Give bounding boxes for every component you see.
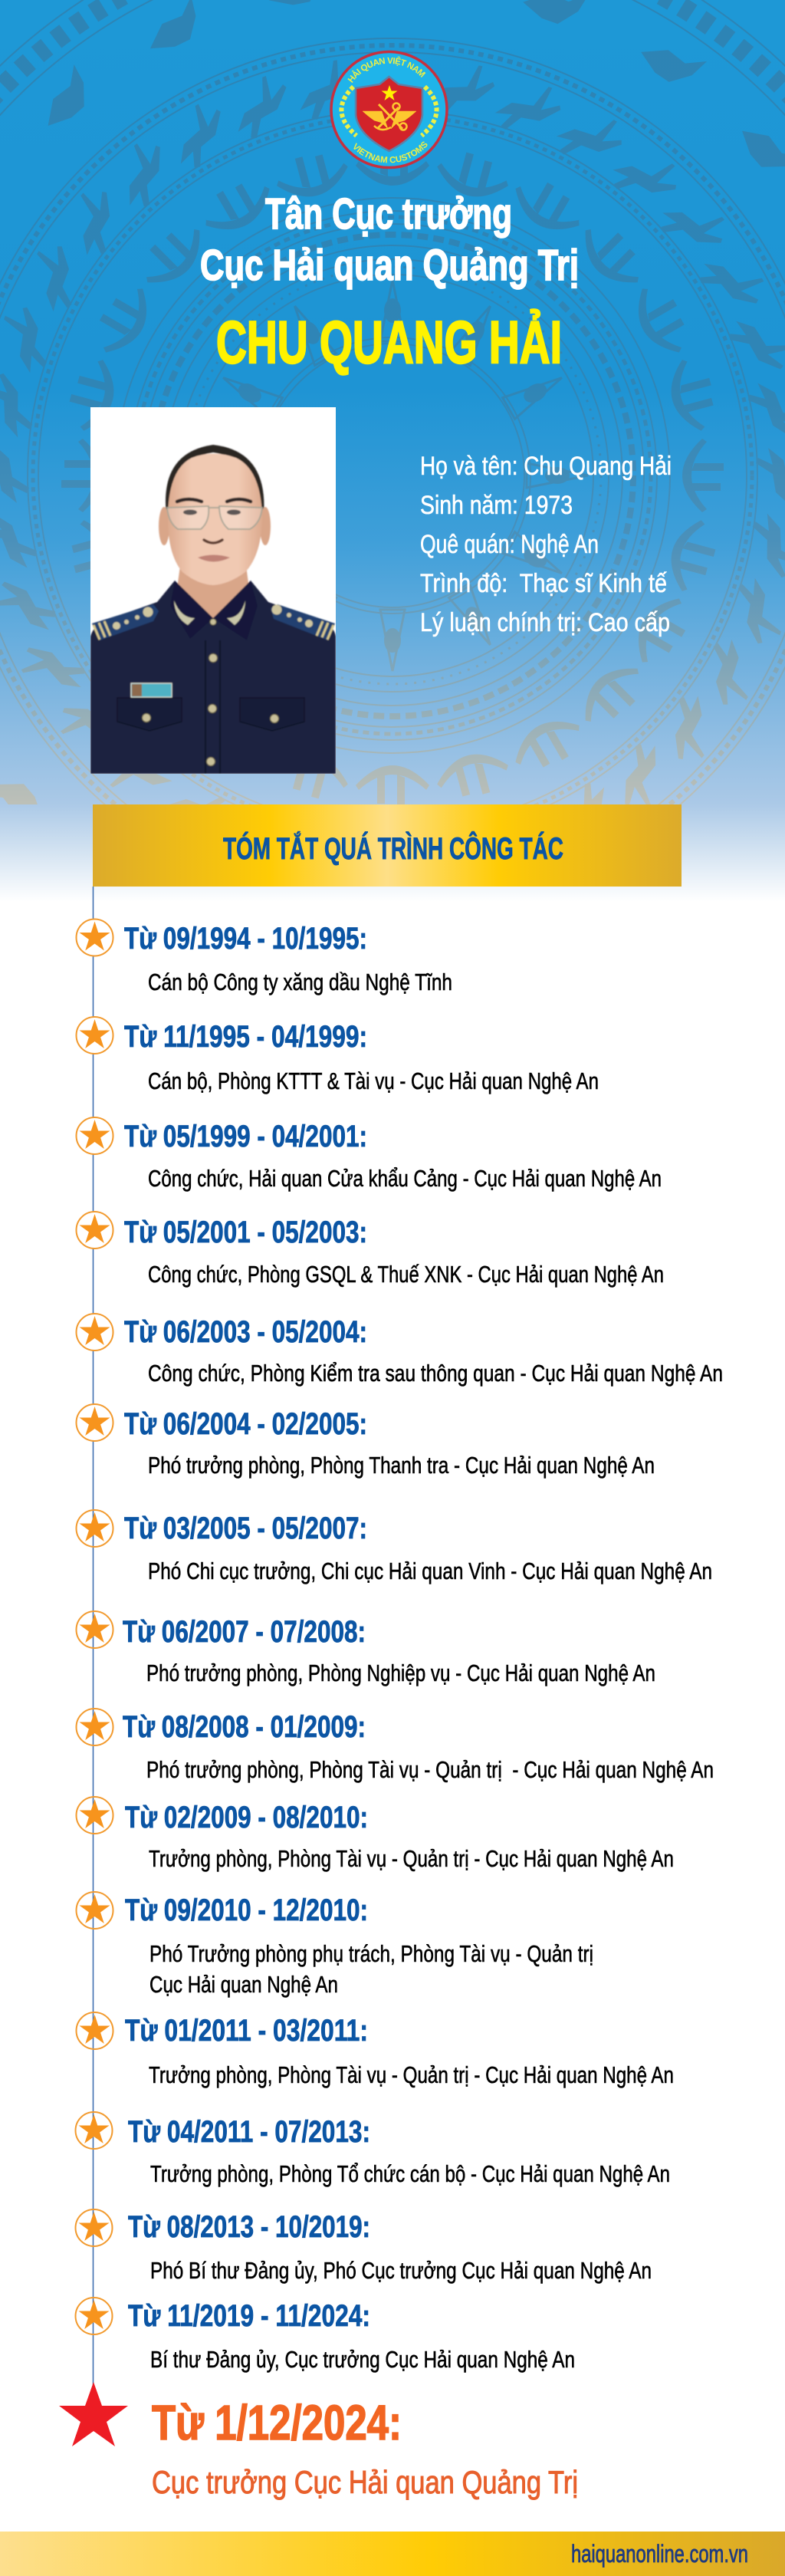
entry 8: [77, 1611, 655, 1686]
entry 10: [77, 1797, 674, 1872]
glasses: [167, 506, 262, 529]
icon: star badge: [77, 1709, 113, 1745]
uniform jacket: [90, 581, 336, 774]
info: full name: Họ và tên: Chu Quang Hải: [420, 452, 672, 481]
info: education: Trình độ: Thạc sĩ Kinh tế: [420, 569, 667, 598]
portrait photo: [90, 407, 336, 774]
icon: star badge: [75, 2112, 112, 2149]
nose: [204, 540, 222, 543]
entry 1: [77, 919, 452, 995]
left epaulet stripes: [94, 621, 110, 640]
person name: CHU QUANG HẢI: [216, 308, 562, 376]
entry 3: [77, 1117, 662, 1192]
collars: [170, 581, 213, 639]
buttons: [143, 619, 279, 765]
icon: star badge: [77, 1212, 113, 1249]
date: Từ 09/1994 - 10/1995:: [124, 922, 367, 956]
icon: shield star: [382, 85, 397, 100]
icon: star badge: [75, 2298, 112, 2334]
collar pins: [174, 600, 245, 625]
date: Từ 05/1999 - 04/2001:: [124, 1120, 367, 1153]
icon: star badge: [77, 1404, 113, 1441]
icon: shield: [356, 77, 422, 151]
date: Từ 02/2009 - 08/2010:: [125, 1801, 368, 1834]
icon: star badge: [77, 1797, 113, 1834]
icon: star badge: [77, 1611, 113, 1648]
entry 2: [77, 1017, 599, 1094]
hair: [166, 445, 264, 515]
eyes: [183, 509, 241, 515]
date: Từ 05/2001 - 05/2003:: [124, 1216, 367, 1249]
final date: Từ 1/12/2024:: [152, 2395, 402, 2450]
ears: [159, 507, 169, 545]
name tag: [131, 683, 172, 697]
date: Từ 04/2011 - 07/2013:: [128, 2115, 370, 2149]
final role: Cục trưởng Cục Hải quan Quảng Trị: [152, 2464, 578, 2500]
role: Bí thư Đảng ủy, Cục trưởng Cục Hải quan Nghệ An: [150, 2346, 575, 2373]
timeline axis: [92, 887, 94, 2385]
entry 14: [75, 2209, 652, 2284]
date: Từ 01/2011 - 03/2011:: [125, 2014, 368, 2048]
icon: star badge: [77, 1892, 113, 1929]
section banner: [93, 804, 682, 887]
logo text top: HẢI QUAN VIỆT NAM: [347, 57, 426, 83]
date: Từ 06/2004 - 02/2005:: [124, 1407, 367, 1441]
entry 5: [77, 1314, 723, 1387]
mouth: [198, 555, 230, 561]
icon: red star: [59, 2382, 128, 2446]
date: Từ 11/1995 - 04/1999:: [124, 1020, 367, 1054]
icon: star badge: [77, 1314, 113, 1351]
icon: right wreath: [422, 87, 437, 136]
entry 15: [75, 2298, 575, 2373]
date: Từ 06/2003 - 05/2004:: [124, 1315, 367, 1349]
entry 12: [77, 2012, 674, 2088]
face: [168, 454, 262, 585]
title: [200, 189, 579, 376]
date: Từ 03/2005 - 05/2007:: [124, 1512, 367, 1545]
title line 1: Tân Cục trưởng: [265, 189, 512, 239]
role: Cán bộ Công ty xăng dầu Nghệ Tĩnh: [148, 969, 452, 995]
entry 4: [77, 1212, 664, 1288]
icon: star badge: [77, 1117, 113, 1154]
left epaulet: [92, 604, 159, 640]
entry 6: [77, 1404, 655, 1479]
final entry: current position: [59, 2382, 578, 2500]
date: Từ 08/2013 - 10/2019:: [128, 2210, 370, 2244]
entry 7: [77, 1510, 712, 1584]
placket: [205, 640, 220, 774]
icon: star badge: [77, 2012, 113, 2049]
role line 1: Phó Trưởng phòng phụ trách, Phòng Tài vụ - Quản trị: [149, 1940, 593, 1967]
logo text bottom: VIETNAM CUSTOMS: [353, 141, 428, 163]
role line 2: Cục Hải quan Nghệ An: [149, 1971, 338, 1998]
role: Phó trưởng phòng, Phòng Nghiệp vụ - Cục Hải quan Nghệ An: [146, 1660, 655, 1686]
pockets: [117, 698, 304, 731]
role: Phó trưởng phòng, Phòng Thanh tra - Cục Hải quan Nghệ An: [148, 1452, 655, 1479]
eyebrows: [177, 499, 251, 502]
date: Từ 06/2007 - 07/2008:: [123, 1615, 366, 1649]
icon: star badge: [77, 1017, 113, 1054]
date: Từ 09/2010 - 12/2010:: [125, 1893, 368, 1927]
entry 9: [77, 1709, 714, 1783]
section heading: TÓM TẮT QUÁ TRÌNH CÔNG TÁC: [223, 831, 563, 866]
icon: wings and crossed keys: [363, 103, 416, 130]
entry 11: [77, 1892, 593, 1998]
right epaulet stripes: [317, 621, 333, 640]
info: birth year: Sinh năm: 1973: [420, 491, 573, 520]
title line 2: Cục Hải quan Quảng Trị: [200, 241, 579, 290]
personal info: [420, 452, 672, 637]
icon: star badge: [77, 1510, 113, 1547]
footer bar: [0, 2532, 785, 2576]
role: Cán bộ, Phòng KTTT & Tài vụ - Cục Hải quan Nghệ An: [148, 1068, 599, 1094]
date: Từ 08/2008 - 01/2009:: [123, 1710, 366, 1744]
logo: Vietnam Customs emblem: [330, 51, 448, 169]
background: bronze drum pattern: [0, 0, 785, 804]
icon: left wreath: [341, 87, 356, 136]
role: Phó Bí thư Đảng ủy, Phó Cục trưởng Cục Hải quan Nghệ An: [150, 2257, 652, 2284]
entry 13: [75, 2112, 670, 2187]
date: Từ 11/2019 - 11/2024:: [128, 2299, 370, 2333]
icon: star badge: [75, 2209, 112, 2246]
info: political theory: Lý luận chính trị: Cao cấp: [420, 608, 670, 637]
right epaulet: [271, 604, 335, 640]
epaulet insignia: [113, 604, 313, 630]
info: hometown: Quê quán: Nghệ An: [420, 530, 599, 559]
icon: star badge: [77, 919, 113, 956]
neck: [176, 568, 250, 618]
